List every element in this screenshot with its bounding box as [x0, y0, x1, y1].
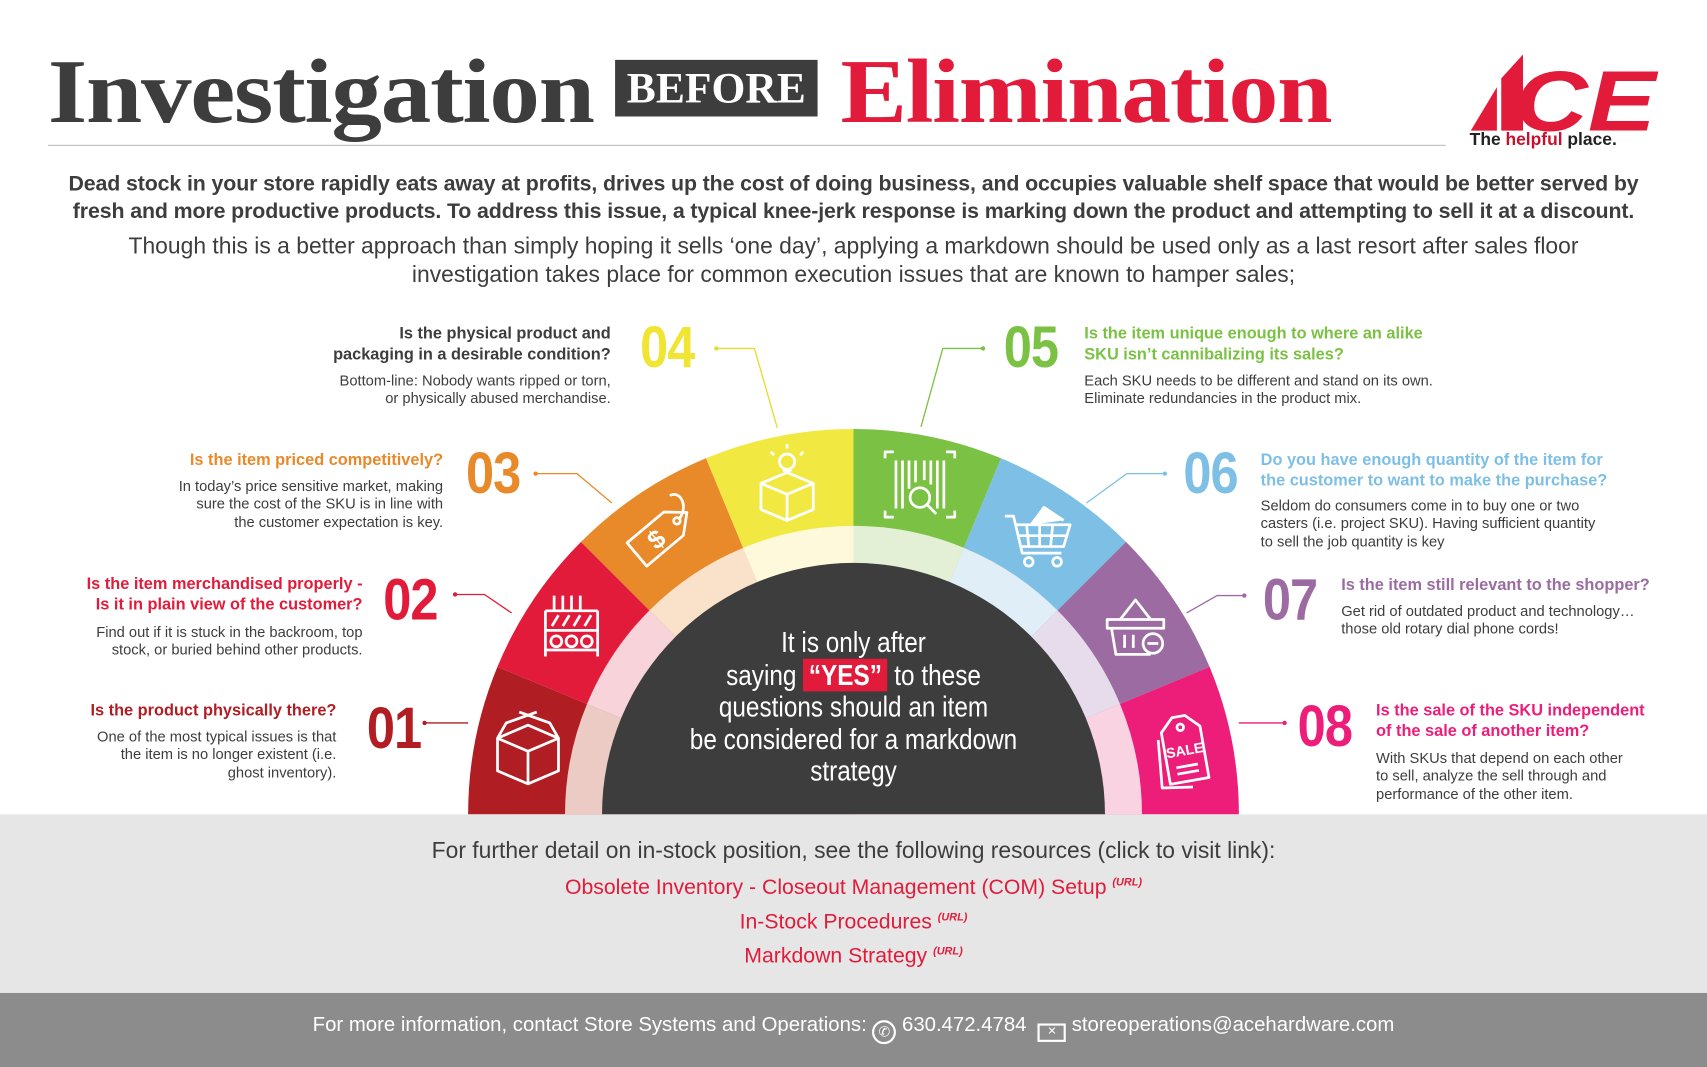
item 08: 08	[1298, 694, 1352, 759]
item 08: of the sale of another item?	[1376, 722, 1589, 740]
center text	[690, 626, 1017, 787]
icon: basket minus	[1107, 600, 1164, 654]
icon: sale tag	[1150, 713, 1210, 792]
item 02: Is the item merchandised properly -	[87, 575, 363, 593]
title: Elimination	[840, 41, 1331, 143]
item 03: sure the cost of the SKU is in line with	[196, 496, 443, 512]
center text: It is only after	[781, 626, 926, 659]
resources panel: Markdown Strategy (URL)	[744, 944, 963, 968]
icon: box	[498, 712, 558, 784]
item 01: ghost inventory).	[228, 764, 336, 780]
item 04: or physically abused merchandise.	[385, 390, 611, 406]
item 06: the customer to want to make the purchase?	[1261, 471, 1607, 490]
item 02: Is it in plain view of the customer?	[96, 596, 363, 614]
item 07: those old rotary dial phone cords!	[1341, 621, 1559, 637]
item 05	[1004, 315, 1433, 406]
center text: be considered for a markdown	[690, 722, 1017, 755]
semicircle chart	[422, 346, 1287, 814]
icon: shelf	[545, 596, 598, 657]
item 05: Each SKU needs to be different and stand on its own.	[1084, 372, 1433, 389]
icon: sale tag: SALE	[1165, 739, 1205, 761]
item 03: the customer expectation is key.	[234, 513, 443, 530]
icon: idea box	[761, 444, 813, 520]
intro text	[68, 172, 1639, 287]
item 04: 04	[640, 315, 695, 380]
resources panel: Obsolete Inventory - Closeout Management (COM) Setup (URL)	[565, 875, 1142, 899]
resources panel: For further detail on in-stock position, see the following resources (click to visit link):	[432, 838, 1275, 863]
logo: ACE: CE	[1514, 54, 1659, 149]
intro text: investigation takes place for common execution issues that are known to hamper sales;	[412, 262, 1295, 287]
item 04: Is the physical product and	[399, 324, 611, 343]
item 05: SKU isn’t cannibalizing its sales?	[1084, 345, 1344, 364]
item 08: Is the sale of the SKU independent	[1376, 701, 1645, 720]
item 06: casters (i.e. project SKU). Having sufficient quantity	[1261, 515, 1595, 532]
item 02: 02	[383, 567, 438, 633]
item 01	[90, 696, 421, 780]
title: Investigation	[48, 41, 594, 143]
item 08: to sell, analyze the sell through and	[1376, 768, 1606, 784]
item 01: Is the product physically there?	[90, 701, 336, 720]
item 06	[1183, 441, 1607, 550]
item 01: One of the most typical issues is that	[97, 728, 336, 745]
item 07: 07	[1263, 567, 1317, 633]
item 06: Seldom do consumers come in to buy one or two	[1261, 498, 1579, 514]
item 02	[87, 567, 438, 658]
item 07: Is the item still relevant to the shopper?	[1341, 576, 1650, 594]
item 04	[333, 315, 696, 406]
item 06: Do you have enough quantity of the item for	[1261, 451, 1603, 469]
item 03: 03	[466, 441, 520, 506]
title: BEFORE	[627, 63, 806, 112]
item 07: Get rid of outdated product and technology…	[1341, 603, 1635, 620]
item 02: stock, or buried behind other products.	[112, 642, 363, 658]
resources panel: In-Stock Procedures (URL)	[740, 910, 967, 934]
item 08	[1298, 694, 1645, 802]
contact bar: ✆	[878, 1023, 890, 1040]
item 04: Bottom-line: Nobody wants ripped or torn,	[340, 372, 611, 389]
logo: ACE	[1470, 54, 1659, 149]
item 07	[1263, 567, 1650, 637]
item 03: Is the item priced competitively?	[190, 451, 443, 469]
item 05: Is the item unique enough to where an alike	[1084, 324, 1423, 343]
item 01: 01	[367, 696, 421, 761]
logo: ACE: The helpful place.	[1470, 131, 1617, 149]
title	[48, 41, 1332, 143]
contact bar	[0, 993, 1707, 1067]
item 08: With SKUs that depend on each other	[1376, 750, 1623, 767]
contact bar: For more information, contact Store Systems and Operations: 630.472.4784 storeoperations@acehardware.com	[313, 1013, 1394, 1035]
item 05: Eliminate redundancies in the product mix.	[1084, 390, 1361, 406]
center text: strategy	[810, 755, 897, 787]
item 03	[179, 441, 520, 530]
center text: saying “YES” to these	[726, 658, 981, 691]
item 06: to sell the job quantity is key	[1261, 533, 1444, 549]
contact bar: ✕	[1047, 1026, 1056, 1038]
intro text: fresh and more productive products. To address this issue, a typical knee-jerk response is marking down the product and attempting to sell it at a discount.	[73, 199, 1634, 223]
resources panel	[0, 814, 1707, 993]
intro text: Though this is a better approach than simply hoping it sells ‘one day’, applying a markdown should be used only as a last resort after sales floor	[128, 234, 1578, 259]
icon: price tag	[621, 491, 701, 567]
item 05: 05	[1004, 315, 1058, 380]
icon: cart	[1005, 507, 1070, 566]
item 08: performance of the other item.	[1376, 786, 1573, 802]
icon: price tag: $	[641, 523, 672, 555]
icon: barcode search	[885, 452, 955, 517]
item 04: packaging in a desirable condition?	[333, 345, 611, 364]
center text: questions should an item	[719, 690, 988, 723]
item 02: Find out if it is stuck in the backroom, top	[96, 624, 363, 640]
item 06: 06	[1183, 441, 1238, 506]
item 01: the item is no longer existent (i.e.	[121, 746, 336, 762]
item 03: In today’s price sensitive market, making	[179, 478, 443, 494]
intro text: Dead stock in your store rapidly eats away at profits, drives up the cost of doing business, and occupies valuable shelf space that would be better served by	[68, 172, 1639, 196]
